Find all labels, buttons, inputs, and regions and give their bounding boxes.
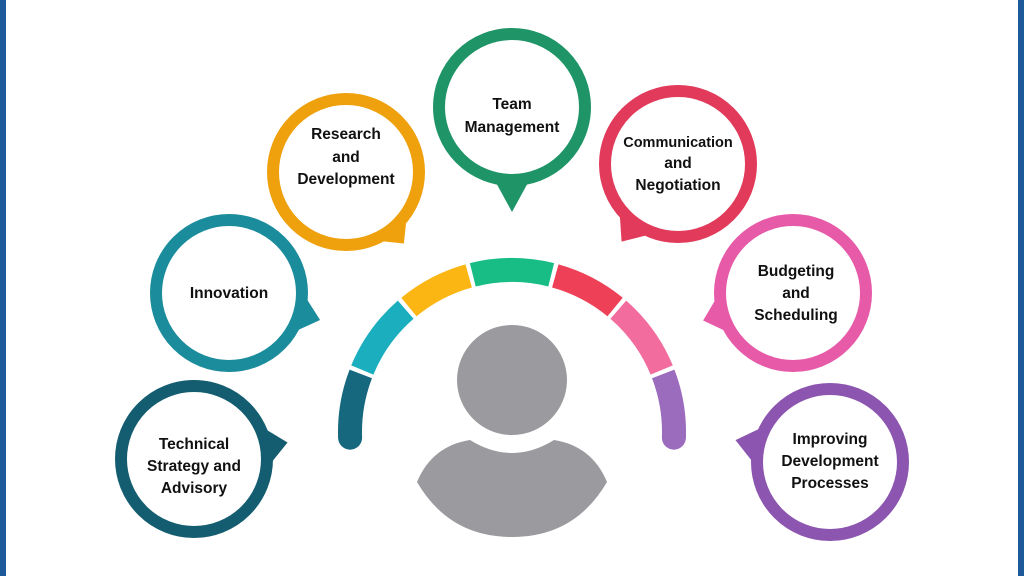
icon: person <box>417 325 607 537</box>
bubble: Communication and Negotiation: Communication <box>623 135 733 151</box>
bubble: Improving Development Processes: Processes <box>791 475 869 492</box>
bubble: Technical Strategy and Advisory: Strategy and <box>147 458 241 475</box>
bubble: Budgeting and Scheduling: Scheduling <box>754 307 838 324</box>
bubble: Communication and Negotiation: and <box>664 155 692 172</box>
bubble: Team Management: Team <box>492 96 532 113</box>
bubble: Research and Development: Development <box>297 171 395 188</box>
bubble: Technical Strategy and Advisory: Advisory <box>161 480 228 497</box>
bubble: Research and Development: and <box>332 149 360 166</box>
bubble: Research and Development <box>273 99 419 256</box>
bubble: Team Management <box>439 34 585 212</box>
bubble: Innovation: Innovation <box>190 285 268 302</box>
bubble: Improving Development Processes: Development <box>781 453 879 470</box>
bubble: Budgeting and Scheduling <box>697 220 866 366</box>
bubble: Improving Development Processes <box>731 389 903 535</box>
bubble: Team Management: Management <box>465 119 559 136</box>
arc: segmented semicircle <box>338 270 686 450</box>
bubble: Improving Development Processes: Improving <box>793 431 867 448</box>
bubble: Technical Strategy and Advisory: Technical <box>159 436 229 453</box>
bubble: Budgeting and Scheduling: and <box>782 285 810 302</box>
bubble: Technical Strategy and Advisory <box>121 386 291 532</box>
bubble: Innovation <box>156 220 326 366</box>
bubble: Communication and Negotiation <box>605 91 751 253</box>
bubble: Communication and Negotiation: Negotiation <box>635 177 721 194</box>
bubble: Budgeting and Scheduling: Budgeting <box>758 263 834 280</box>
bubble: Research and Development: Research <box>311 126 381 143</box>
